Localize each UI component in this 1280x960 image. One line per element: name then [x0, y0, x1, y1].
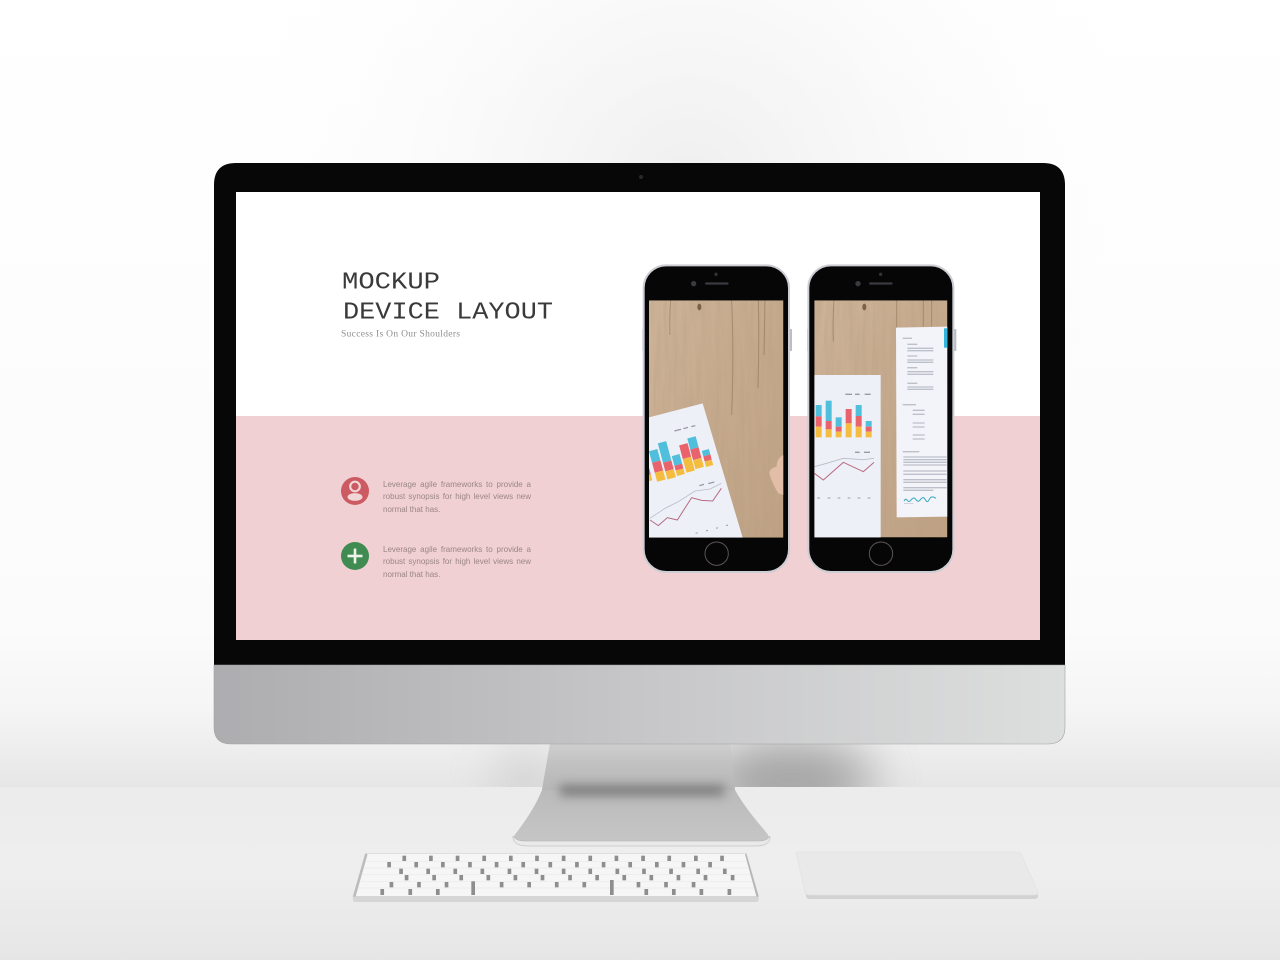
key rows	[358, 861, 754, 888]
title: MOCKUP	[342, 270, 440, 296]
slide screen	[236, 192, 1040, 640]
resume paper	[896, 327, 947, 517]
phone 1 body	[642, 265, 792, 572]
line chart	[650, 488, 721, 526]
hand	[769, 455, 783, 495]
monitor chin	[214, 665, 1065, 744]
icon: person	[341, 477, 369, 505]
monitor stand	[513, 744, 770, 846]
text block: second description	[383, 545, 531, 579]
trackpad	[796, 852, 1038, 899]
phone 1	[641, 265, 792, 572]
text block: first description: Leverage agile frameworks to provide a	[383, 480, 531, 489]
title: DEVICE LAYOUT	[343, 300, 553, 326]
text block: second description: robust synopsis for high level views new	[383, 557, 531, 566]
text block: first description	[383, 480, 531, 514]
line chart	[814, 462, 874, 480]
legend dashes	[845, 394, 871, 452]
bars	[641, 426, 728, 533]
phone 2	[807, 265, 956, 572]
keyboard	[353, 853, 759, 902]
icon: plus	[341, 542, 369, 570]
blue tag	[944, 328, 947, 348]
title	[342, 270, 553, 326]
phone 2 screen photo	[814, 300, 947, 538]
legend dashes	[674, 426, 714, 486]
bars	[814, 394, 874, 498]
chart paper	[814, 375, 881, 538]
resume text	[903, 338, 947, 504]
signature	[904, 497, 936, 502]
chart paper	[649, 403, 743, 538]
text block: second description: Leverage agile frameworks to provide a	[383, 545, 531, 554]
webcam	[639, 175, 643, 179]
text block: second description: normal that has.	[383, 570, 440, 579]
text block: first description: robust synopsis for high level views new	[383, 492, 531, 501]
monitor	[214, 163, 1065, 744]
phone 2 body	[807, 265, 956, 572]
text block: first description: normal that has.	[383, 505, 440, 514]
subtitle: Success Is On Our Shoulders	[341, 330, 460, 340]
phone 1 screen photo	[641, 300, 783, 538]
key gaps	[380, 856, 734, 895]
monitor bezel	[214, 163, 1065, 665]
